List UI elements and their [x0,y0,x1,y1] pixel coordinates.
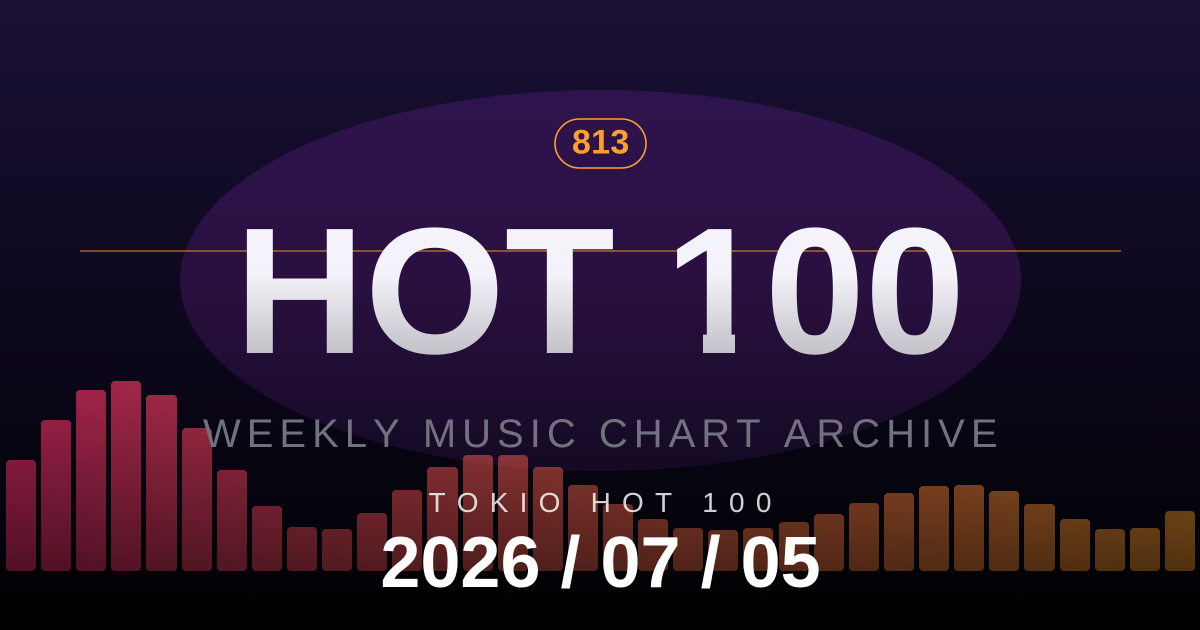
glow ellipse [180,90,1021,471]
subtitle: WEEKLY MUSIC CHART ARCHIVE [203,412,1004,456]
equalizer bars [6,381,1195,571]
divider line [80,250,1121,252]
brand name: TOKIO HOT 100 [428,487,783,518]
issue number badge [555,119,646,168]
issue number badge: 813 [572,124,630,162]
date: 2026 / 07 / 05 [380,523,821,603]
title: HOT 100 [235,191,965,392]
